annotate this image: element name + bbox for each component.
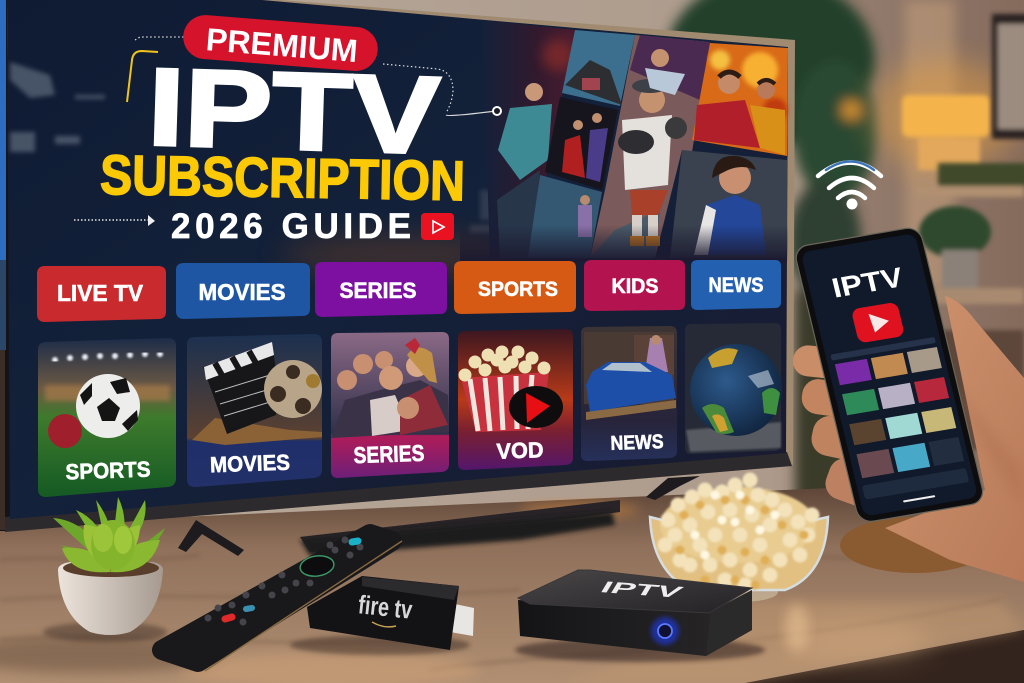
card: news: NEWS	[610, 431, 664, 455]
background plant	[665, 0, 877, 510]
succulent leaves	[53, 497, 165, 572]
connector line and dot	[127, 37, 501, 116]
tab: kids: KIDS	[612, 275, 658, 298]
app nav bar	[862, 468, 969, 500]
icon: clapperboard	[203, 342, 276, 434]
movie poster collage	[460, 20, 788, 262]
tv stand	[178, 476, 700, 556]
tv frame	[0, 0, 795, 531]
popcorn	[660, 480, 816, 585]
icon: wifi	[818, 162, 881, 210]
usb plug	[450, 603, 474, 636]
tab: kids	[584, 260, 685, 311]
poster: beach	[562, 30, 635, 106]
app thumbnails	[835, 347, 964, 478]
card: sports	[38, 338, 176, 497]
card: vod: VOD	[496, 437, 544, 464]
card: movies	[187, 334, 322, 487]
icon: popcorn bucket	[461, 352, 549, 432]
poster: young fan	[670, 150, 787, 258]
box logo: IPTV	[597, 578, 687, 601]
category tabs	[37, 260, 781, 322]
title: 2026 guide: 2026 GUIDE	[171, 207, 411, 246]
popcorn bowl	[650, 480, 828, 602]
title: IPTV: IPTV	[146, 45, 442, 178]
card: sports: SPORTS	[65, 457, 151, 484]
screen backdrop streaks	[10, 62, 510, 233]
tab: movies: MOVIES	[198, 279, 286, 305]
round wooden board	[840, 517, 990, 573]
smartphone	[793, 226, 986, 524]
tv	[0, 0, 795, 532]
icon: globe	[690, 344, 782, 436]
tab: news	[691, 260, 781, 310]
poster: fire	[692, 43, 788, 156]
pot	[58, 562, 163, 635]
premium badge	[182, 13, 379, 73]
power light	[651, 617, 679, 645]
hand behind phone	[885, 296, 1024, 582]
tab: series	[315, 262, 447, 317]
card: series: SERIES	[353, 440, 425, 468]
fire tv stick	[290, 576, 474, 655]
tab: live tv	[37, 266, 166, 322]
app search bar	[830, 337, 936, 361]
poster: stadium	[528, 175, 602, 258]
icon: phone play button	[851, 302, 905, 344]
family group	[331, 338, 449, 438]
wall shelves with plants	[915, 163, 1024, 450]
icon: play badge	[421, 213, 454, 240]
tab: news: NEWS	[708, 274, 764, 297]
tab: sports	[454, 261, 576, 314]
card: news	[581, 326, 677, 461]
remote buttons	[208, 540, 360, 622]
dotted arrow	[74, 215, 155, 226]
remote control	[162, 534, 402, 671]
tv screen	[7, 0, 788, 519]
category cards	[38, 323, 782, 497]
phone logo: IPTV	[829, 261, 907, 304]
fingers	[791, 344, 888, 512]
stick logo: fire tv	[357, 589, 414, 625]
card: series	[331, 332, 449, 478]
tab: live tv: LIVE TV	[57, 280, 144, 306]
card: movies: MOVIES	[210, 450, 290, 477]
tab: series: SERIES	[340, 278, 416, 303]
table lamp	[870, 60, 1020, 170]
poster: couple	[545, 97, 618, 190]
icon: small ball	[48, 414, 82, 448]
tab: movies	[176, 263, 310, 319]
icon: film reel	[264, 360, 322, 418]
iptv box	[515, 570, 765, 662]
icon: play button	[509, 386, 563, 428]
card: globe	[685, 323, 782, 454]
picture frame	[992, 14, 1024, 139]
card: vod	[458, 329, 573, 470]
icon: football	[76, 374, 140, 438]
title: SUBSCRIPTION: SUBSCRIPTION	[99, 143, 466, 212]
poster: adventurer	[590, 35, 710, 258]
poster: hero	[482, 20, 575, 258]
premium badge: PREMIUM	[205, 21, 359, 69]
d-pad	[299, 554, 335, 578]
tab: sports: SPORTS	[478, 278, 558, 301]
potted plant	[43, 497, 167, 642]
table	[0, 488, 1024, 683]
